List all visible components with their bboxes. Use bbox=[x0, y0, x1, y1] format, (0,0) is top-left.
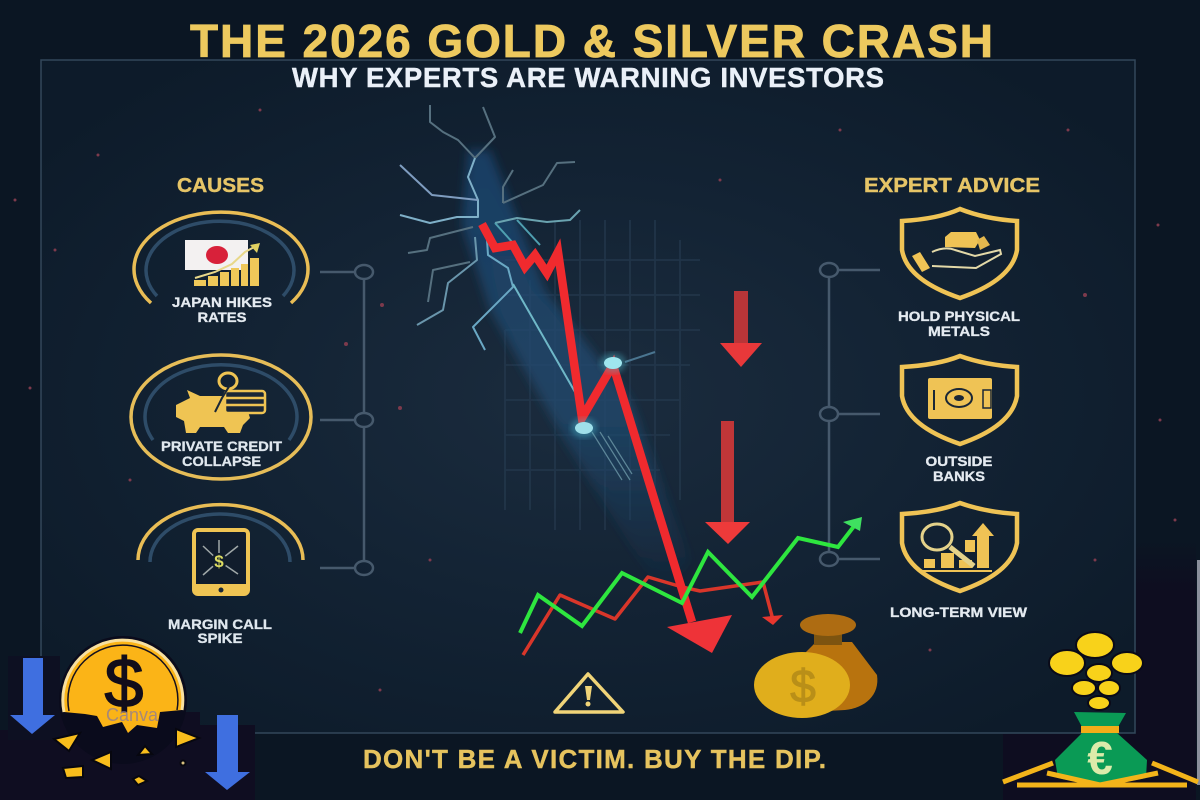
advice: outside banks: BANKS bbox=[933, 469, 985, 484]
advice: hold physical metals: HOLD PHYSICAL bbox=[898, 309, 1020, 324]
icon: gold rays bbox=[1003, 763, 1198, 785]
panel: expert advice bbox=[864, 175, 1040, 620]
chart: green and red lines bbox=[482, 224, 862, 655]
sticker: broken dollar coin bbox=[0, 636, 255, 800]
cause: Japan hikes rates: RATES bbox=[198, 310, 246, 325]
heading: expert advice: EXPERT ADVICE bbox=[864, 175, 1040, 197]
cause: Japan hikes rates bbox=[134, 212, 308, 325]
arrow: blue down right bbox=[205, 715, 250, 790]
advice: long-term view bbox=[890, 503, 1027, 620]
heading: causes: CAUSES bbox=[177, 175, 264, 197]
cause: margin call spike: MARGIN CALL bbox=[168, 617, 272, 632]
icon: warning triangle bbox=[555, 674, 623, 712]
arrow: red down upper bbox=[720, 291, 762, 367]
cause: private credit collapse: PRIVATE CREDIT bbox=[161, 439, 283, 454]
icon: crack lines bbox=[400, 105, 655, 480]
cause: margin call spike bbox=[138, 505, 303, 646]
icon: glowing nodes bbox=[571, 353, 626, 438]
subtitle: WHY EXPERTS ARE WARNING INVESTORS bbox=[292, 62, 884, 93]
red secondary line bbox=[523, 577, 783, 655]
icon: money bag bbox=[754, 614, 877, 718]
icon: falling coins bbox=[1049, 632, 1143, 710]
panel: causes bbox=[131, 175, 311, 646]
title: THE 2026 GOLD & SILVER CRASH bbox=[190, 15, 993, 67]
advice: outside banks bbox=[902, 356, 1017, 484]
cause: margin call spike: $ bbox=[214, 552, 224, 571]
sticker: euro money bag bbox=[1003, 540, 1200, 800]
icon: coin: Canva bbox=[106, 705, 159, 725]
advice: hold physical metals bbox=[898, 209, 1020, 339]
icon: coin bbox=[63, 640, 183, 733]
icon: coin: $ bbox=[105, 644, 143, 722]
main red crash line bbox=[482, 224, 732, 653]
icon: green bag bbox=[1055, 712, 1147, 787]
arrow: blue down left bbox=[10, 658, 55, 734]
left connector bbox=[320, 265, 373, 575]
footer call to action: DON'T BE A VICTIM. BUY THE DIP. bbox=[363, 744, 826, 774]
cause: private credit collapse: COLLAPSE bbox=[182, 454, 261, 469]
icon: coin fragments bbox=[54, 729, 199, 785]
right connector bbox=[820, 263, 880, 566]
arrow: red down lower bbox=[705, 421, 750, 544]
green recovery line bbox=[520, 517, 862, 633]
advice: outside banks: OUTSIDE bbox=[926, 454, 992, 469]
icon: money bag: $ bbox=[790, 660, 816, 712]
cause: private credit collapse bbox=[131, 355, 311, 479]
sticker: euro money bag: € bbox=[1087, 732, 1113, 784]
central grid and shadow band bbox=[462, 150, 700, 600]
cause: margin call spike: SPIKE bbox=[198, 631, 242, 646]
cause: Japan hikes rates: JAPAN HIKES bbox=[172, 295, 272, 310]
advice: long-term view: LONG-TERM VIEW bbox=[890, 605, 1027, 620]
advice: hold physical metals: METALS bbox=[928, 324, 990, 339]
